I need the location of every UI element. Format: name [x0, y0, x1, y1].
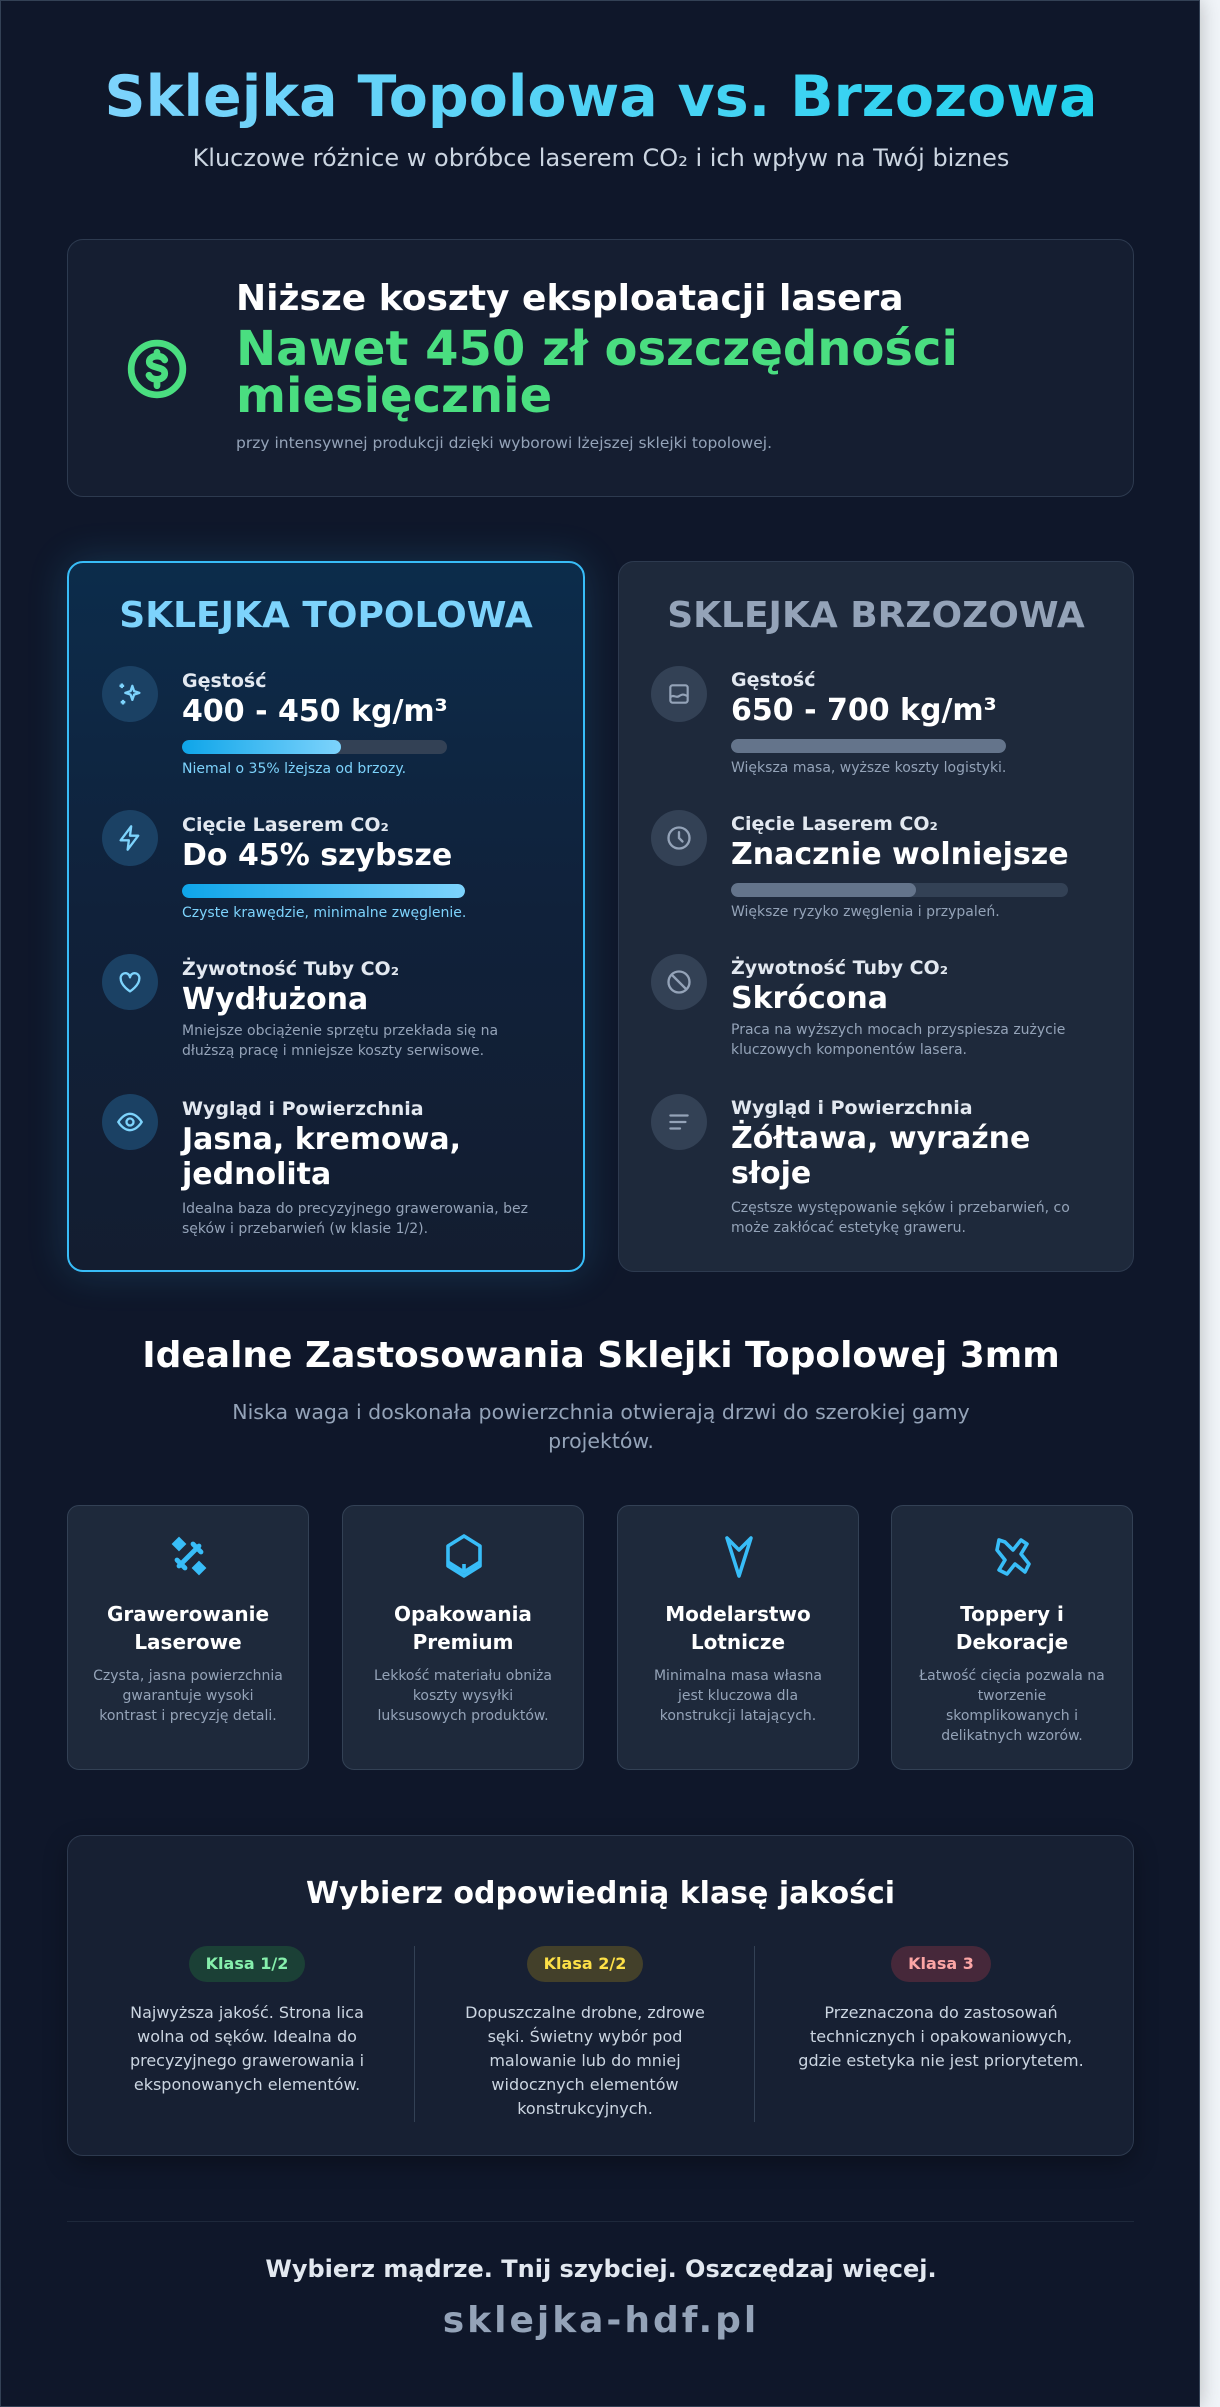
row: density	[102, 666, 448, 777]
panel: savings	[67, 239, 1134, 497]
card: modelling: Minimalna masa własna jest kluczowa dla konstrukcji latających.	[654, 1668, 822, 1724]
card: modelling: Modelarstwo Lotnicze	[665, 1602, 811, 1654]
row: cutting	[102, 810, 466, 921]
icon: puzzle	[995, 1538, 1031, 1576]
icon: engraving	[172, 1536, 206, 1576]
class 2/2: Klasa 2/2	[544, 1954, 626, 1973]
row: density: 650 - 700 kg/m³	[731, 693, 997, 728]
card: engraving: Grawerowanie Laserowe	[107, 1602, 269, 1654]
panel: quality classes	[67, 1835, 1134, 2156]
heading: birch: SKLEJKA BRZOZOWA	[667, 595, 1085, 636]
subtitle: applications: Niska waga i doskonała powierzchnia otwierają drzwi do szerokiej gamy projektów.	[232, 1400, 970, 1453]
row: tube life: Żywotność Tuby CO₂	[182, 958, 399, 980]
card: packaging	[342, 1505, 584, 1770]
panel: birch	[618, 561, 1134, 1272]
card: modelling	[617, 1505, 859, 1770]
title: Sklejka Topolowa vs. Brzozowa	[105, 64, 1097, 130]
row: tube life	[102, 954, 498, 1059]
row: cutting: Cięcie Laserem CO₂	[182, 814, 389, 836]
row: density: Gęstość	[731, 669, 816, 691]
panel: poplar	[67, 561, 585, 1272]
class 1/2: Klasa 1/2	[206, 1954, 288, 1973]
heading: savings: Niższe koszty eksploatacji lasera	[236, 278, 904, 319]
row: surface: Żółtawa, wyraźne słoje	[731, 1121, 1030, 1191]
icon: dollar	[128, 340, 186, 398]
row: density	[651, 666, 1006, 776]
note: przy intensywnej produkcji dzięki wyborowi lżejszej sklejki topolowej.	[236, 434, 772, 452]
row: cutting: Znacznie wolniejsze	[731, 837, 1069, 872]
class 2/2: Dopuszczalne drobne, zdrowe sęki. Świetny wybór pod malowanie lub do mniej widocznych elementów konstrukcyjnych.	[465, 2003, 705, 2118]
row: tube life: Żywotność Tuby CO₂	[731, 957, 948, 979]
row: cutting: Większe ryzyko zwęglenia i przypaleń.	[731, 904, 1000, 920]
row: cutting	[651, 810, 1069, 920]
icon: box	[446, 1534, 482, 1578]
footer domain: sklejka-hdf.pl	[443, 2300, 759, 2341]
row: surface: Jasna, kremowa, jednolita	[182, 1122, 461, 1192]
row: cutting: Czyste krawędzie, minimalne zwęglenie.	[182, 905, 466, 921]
big number: Nawet 450 zł oszczędności miesięcznie	[236, 321, 958, 424]
row: surface: Wygląd i Powierzchnia	[182, 1098, 424, 1120]
heading: applications: Idealne Zastosowania Sklejki Topolowej 3mm	[142, 1335, 1060, 1376]
card: toppers: Łatwość cięcia pozwala na tworzenie skomplikowanych i delikatnych wzorów.	[919, 1668, 1105, 1744]
row: tube life: Skrócona	[731, 981, 888, 1016]
card: toppers: Toppery i Dekoracje	[956, 1602, 1068, 1654]
row: surface	[651, 1094, 1070, 1236]
row: surface: Wygląd i Powierzchnia	[731, 1097, 973, 1119]
row: density: Większa masa, wyższe koszty logistyki.	[731, 760, 1006, 776]
class 2/2	[465, 1946, 705, 2118]
row: surface: Częstsze występowanie sęków i przebarwień, co może zakłócać estetykę graweru.	[731, 1200, 1070, 1236]
row: cutting: Cięcie Laserem CO₂	[731, 813, 938, 835]
row: surface: Idealna baza do precyzyjnego grawerowania, bez sęków i przebarwień (w klasie 1/2).	[182, 1201, 528, 1237]
class 3: Klasa 3	[908, 1954, 974, 1973]
row: tube life: Praca na wyższych mocach przyspiesza zużycie kluczowych komponentów lasera.	[731, 1022, 1065, 1058]
card: engraving: Czysta, jasna powierzchnia gwarantuje wysoki kontrast i precyzję detali.	[93, 1668, 283, 1724]
card: packaging: Lekkość materiału obniża koszty wysyłki luksusowych produktów.	[374, 1668, 552, 1724]
heading: quality: Wybierz odpowiednią klasę jakości	[306, 1876, 895, 1911]
card: toppers	[891, 1505, 1133, 1770]
row: tube life: Mniejsze obciążenie sprzętu przekłada się na dłuższą pracę i mniejsze koszty serwisowe.	[182, 1023, 498, 1059]
row: surface	[102, 1094, 528, 1237]
card: engraving	[67, 1505, 309, 1770]
row: density: 400 - 450 kg/m³	[182, 694, 448, 729]
row: density: Niemal o 35% lżejsza od brzozy.	[182, 761, 406, 777]
subtitle: Kluczowe różnice w obróbce laserem CO₂ i ich wpływ na Twój biznes	[193, 144, 1009, 172]
class 3	[798, 1946, 1084, 2070]
class 3: Przeznaczona do zastosowań technicznych i opakowaniowych, gdzie estetyka nie jest priorytetem.	[798, 2003, 1084, 2070]
footer slogan: Wybierz mądrze. Tnij szybciej. Oszczędzaj więcej.	[265, 2255, 937, 2283]
row: tube life	[651, 954, 1065, 1058]
row: density: Gęstość	[182, 670, 266, 692]
row: cutting: Do 45% szybsze	[182, 838, 452, 873]
class 1/2	[130, 1946, 364, 2094]
heading: poplar: SKLEJKA TOPOLOWA	[119, 595, 533, 636]
icon: plane	[725, 1536, 753, 1578]
class 1/2: Najwyższa jakość. Strona lica wolna od sęków. Idealna do precyzyjnego grawerowania i eksponowanych elementów.	[130, 2003, 364, 2094]
row: tube life: Wydłużona	[182, 982, 368, 1017]
card: packaging: Opakowania Premium	[394, 1602, 532, 1654]
